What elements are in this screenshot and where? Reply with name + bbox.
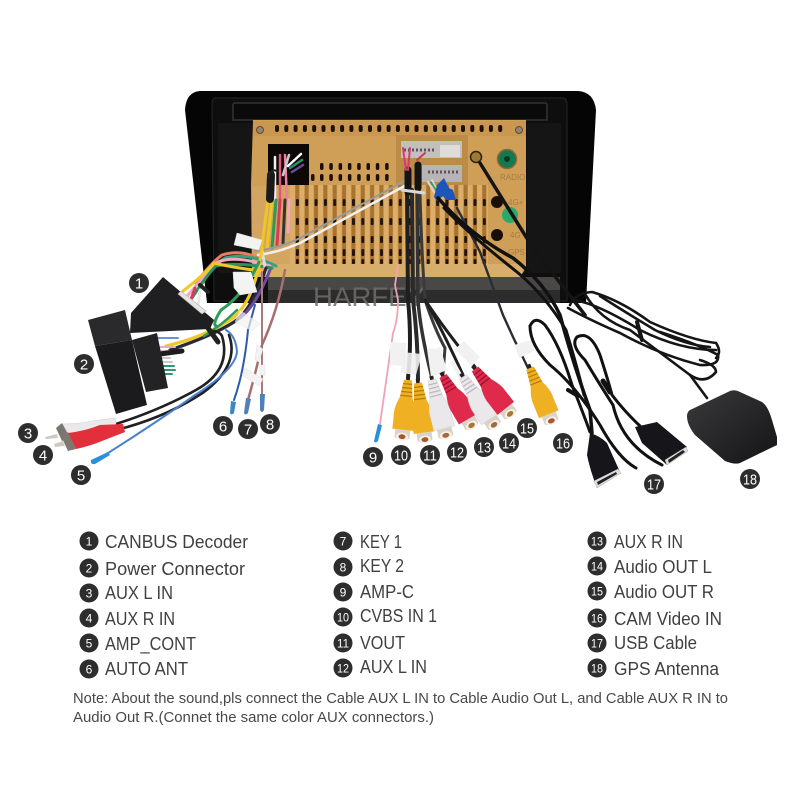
badge 5 xyxy=(71,465,91,485)
item 7 xyxy=(334,532,402,552)
item 14: 14 xyxy=(591,560,603,574)
RCA connector 12 white xyxy=(421,374,457,442)
wires behind power connector xyxy=(155,337,178,339)
badge 4: 4 xyxy=(39,448,47,464)
item 9: AMP-C xyxy=(360,582,414,602)
badge 1 xyxy=(129,273,149,293)
RCA connector 10 yellow xyxy=(391,375,419,442)
terminal 9 xyxy=(374,424,382,442)
gold antenna socket xyxy=(470,152,482,162)
item 16: CAM Video IN xyxy=(614,609,722,629)
wires running down to connectors xyxy=(166,248,262,346)
item 10: 10 xyxy=(337,610,349,624)
GPS antenna puck xyxy=(687,390,777,464)
top face xyxy=(88,310,132,346)
badge 18: 18 xyxy=(743,472,757,488)
plug sleeve at bundle xyxy=(408,165,418,192)
left RCA plugs xyxy=(45,418,125,451)
blue clips xyxy=(434,178,456,201)
item 16: 16 xyxy=(591,612,603,626)
item 17: 17 xyxy=(591,636,603,650)
item 5: 5 xyxy=(86,636,93,650)
badge 10: 10 xyxy=(394,448,408,464)
centre RCA labels xyxy=(390,340,534,380)
socket wires xyxy=(275,154,303,200)
item 5: AMP_CONT xyxy=(105,634,196,655)
item 11: VOUT xyxy=(360,633,405,653)
bottom shadow band xyxy=(268,277,560,303)
badge 16: 16 xyxy=(556,436,570,452)
grey twin cables to centre xyxy=(255,178,410,251)
RCA connector 13 red xyxy=(432,367,483,434)
thin camera cable xyxy=(457,208,528,368)
white plug xyxy=(45,418,116,441)
item 9: 9 xyxy=(340,586,347,600)
item 6: 6 xyxy=(86,662,93,676)
item 13: 13 xyxy=(591,534,603,548)
screws xyxy=(256,126,264,134)
terminal 6 xyxy=(230,401,236,414)
item 2: 2 xyxy=(86,562,93,576)
note text xyxy=(73,691,728,726)
photo number badges xyxy=(18,273,760,494)
item 13: AUX R IN xyxy=(614,532,683,552)
radio antenna port xyxy=(498,150,516,168)
port labels: 4G xyxy=(510,231,521,240)
left connector socket xyxy=(268,144,309,185)
side plug xyxy=(132,333,168,392)
wire to 8 xyxy=(261,272,263,396)
badge 3: 3 xyxy=(24,426,32,442)
item 18: GPS Antenna xyxy=(614,659,720,679)
item 2: Power Connector xyxy=(105,559,245,579)
black audio cables xyxy=(116,331,224,424)
note text: Note: About the sound,pls connect the Cable AUX L IN to Cable Audio Out L, and Cable AUX R IN to xyxy=(73,691,728,707)
wire to 6 xyxy=(234,305,255,400)
item 15: 15 xyxy=(591,584,603,598)
USB connector B xyxy=(635,422,688,465)
item 11 xyxy=(334,633,405,653)
black sleeve xyxy=(270,175,271,199)
badge 6: 6 xyxy=(219,418,227,436)
item 3: 3 xyxy=(86,586,93,600)
gold chassis xyxy=(251,120,526,277)
item 3 xyxy=(80,583,173,603)
wiring harness from left socket xyxy=(105,154,410,455)
RCA connector 16 yellow xyxy=(519,360,563,428)
RCA connector 15 red xyxy=(464,359,521,424)
centre RCA bundle cables xyxy=(380,148,585,424)
terminal 5 xyxy=(91,452,110,464)
grey plug bottom xyxy=(422,165,462,182)
item 8: KEY 2 xyxy=(360,556,404,576)
note text: Audio Out R.(Connet the same color AUX connectors.) xyxy=(73,710,434,726)
badge 12: 12 xyxy=(450,444,464,462)
coloured loom over the frame xyxy=(196,253,266,283)
legend column 2 xyxy=(334,532,437,678)
port labels: GPS xyxy=(508,248,525,257)
cable ties xyxy=(208,328,218,342)
port labels xyxy=(500,173,525,257)
badge 17: 17 xyxy=(647,476,661,494)
cable labels xyxy=(233,233,265,386)
badge 8: 8 xyxy=(266,416,274,434)
badge 8 xyxy=(260,414,280,434)
item 1: 1 xyxy=(86,534,93,548)
item 10: CVBS IN 1 xyxy=(360,606,437,626)
badge 3 xyxy=(18,423,38,443)
port labels: RADIO xyxy=(500,173,525,182)
item 12 xyxy=(334,657,427,678)
right side ports xyxy=(491,196,503,208)
coloured wires to port xyxy=(428,180,438,192)
green badge xyxy=(502,207,518,223)
item 1: CANBUS Decoder xyxy=(105,532,248,552)
item 7: 7 xyxy=(340,534,347,548)
terminal 8 xyxy=(260,394,265,412)
item 4 xyxy=(80,608,175,629)
badge 5: 5 xyxy=(77,468,85,484)
item 10 xyxy=(334,606,437,626)
badge 9: 9 xyxy=(369,450,377,466)
item 7: KEY 1 xyxy=(360,532,402,552)
watermark: HARFEY xyxy=(313,282,425,312)
item 9 xyxy=(334,582,414,602)
cooling fins xyxy=(290,185,488,265)
head unit rear panel xyxy=(180,91,600,312)
item 8: 8 xyxy=(340,560,347,574)
USB connector A xyxy=(587,433,621,488)
badge 1: 1 xyxy=(135,276,143,292)
item 12: 12 xyxy=(337,662,349,676)
RCA connector 11 yellow xyxy=(407,378,436,445)
white cable tie xyxy=(402,190,424,193)
middle connector recess xyxy=(396,135,468,185)
grey plug top xyxy=(401,141,462,158)
badge 11 xyxy=(420,445,440,465)
item 6: AUTO ANT xyxy=(105,659,188,679)
item 8 xyxy=(334,556,404,576)
USB cables xyxy=(438,198,662,468)
power connector xyxy=(88,310,168,414)
CANBUS decoder box xyxy=(130,277,214,333)
badge 13: 13 xyxy=(477,440,491,456)
badge 2 xyxy=(74,354,94,374)
antenna cable xyxy=(480,163,585,315)
badge 7 xyxy=(238,419,258,439)
small white connector xyxy=(178,291,206,314)
blue amp cable xyxy=(105,330,237,455)
wire to 7 xyxy=(248,270,285,400)
item 11: 11 xyxy=(337,636,349,650)
legend column 3 xyxy=(588,532,722,679)
outer black bezel xyxy=(185,91,596,303)
blue pin terminals xyxy=(91,394,382,464)
item 12: AUX L IN xyxy=(360,657,427,677)
plug pins xyxy=(404,150,458,172)
badge 2: 2 xyxy=(80,356,88,374)
legend column 1 xyxy=(80,532,248,679)
item 4: AUX R IN xyxy=(105,609,175,629)
item 5 xyxy=(80,634,196,655)
item 13 xyxy=(588,532,683,552)
front face xyxy=(95,340,147,414)
item 17: USB Cable xyxy=(614,633,697,653)
badge 6 xyxy=(213,416,233,436)
item 15: Audio OUT R xyxy=(614,582,714,602)
badge 14: 14 xyxy=(502,436,516,452)
RCA connector 14 white xyxy=(452,368,505,434)
item 18: 18 xyxy=(591,662,603,676)
vertical bundle xyxy=(262,200,289,248)
badge 4 xyxy=(33,445,53,465)
badge 11: 11 xyxy=(423,448,437,464)
badge 9 xyxy=(363,447,383,467)
badge 7: 7 xyxy=(244,422,252,438)
item 3: AUX L IN xyxy=(105,583,173,603)
red plug xyxy=(54,424,125,451)
terminal 7 xyxy=(244,398,251,414)
item 14: Audio OUT L xyxy=(614,557,712,577)
item 4: 4 xyxy=(86,612,93,626)
port labels: 4G+ xyxy=(508,198,524,207)
GPS cable coil xyxy=(568,292,719,398)
badge 15: 15 xyxy=(520,420,534,438)
